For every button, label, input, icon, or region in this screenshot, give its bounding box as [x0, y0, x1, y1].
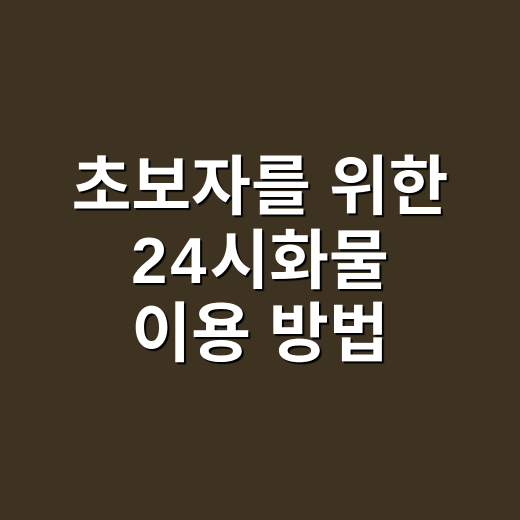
- title: 24시화물: [131, 224, 389, 297]
- title: [72, 150, 449, 370]
- title: 초보자를 위한: [72, 150, 448, 223]
- title: 이용 방법: [131, 297, 389, 370]
